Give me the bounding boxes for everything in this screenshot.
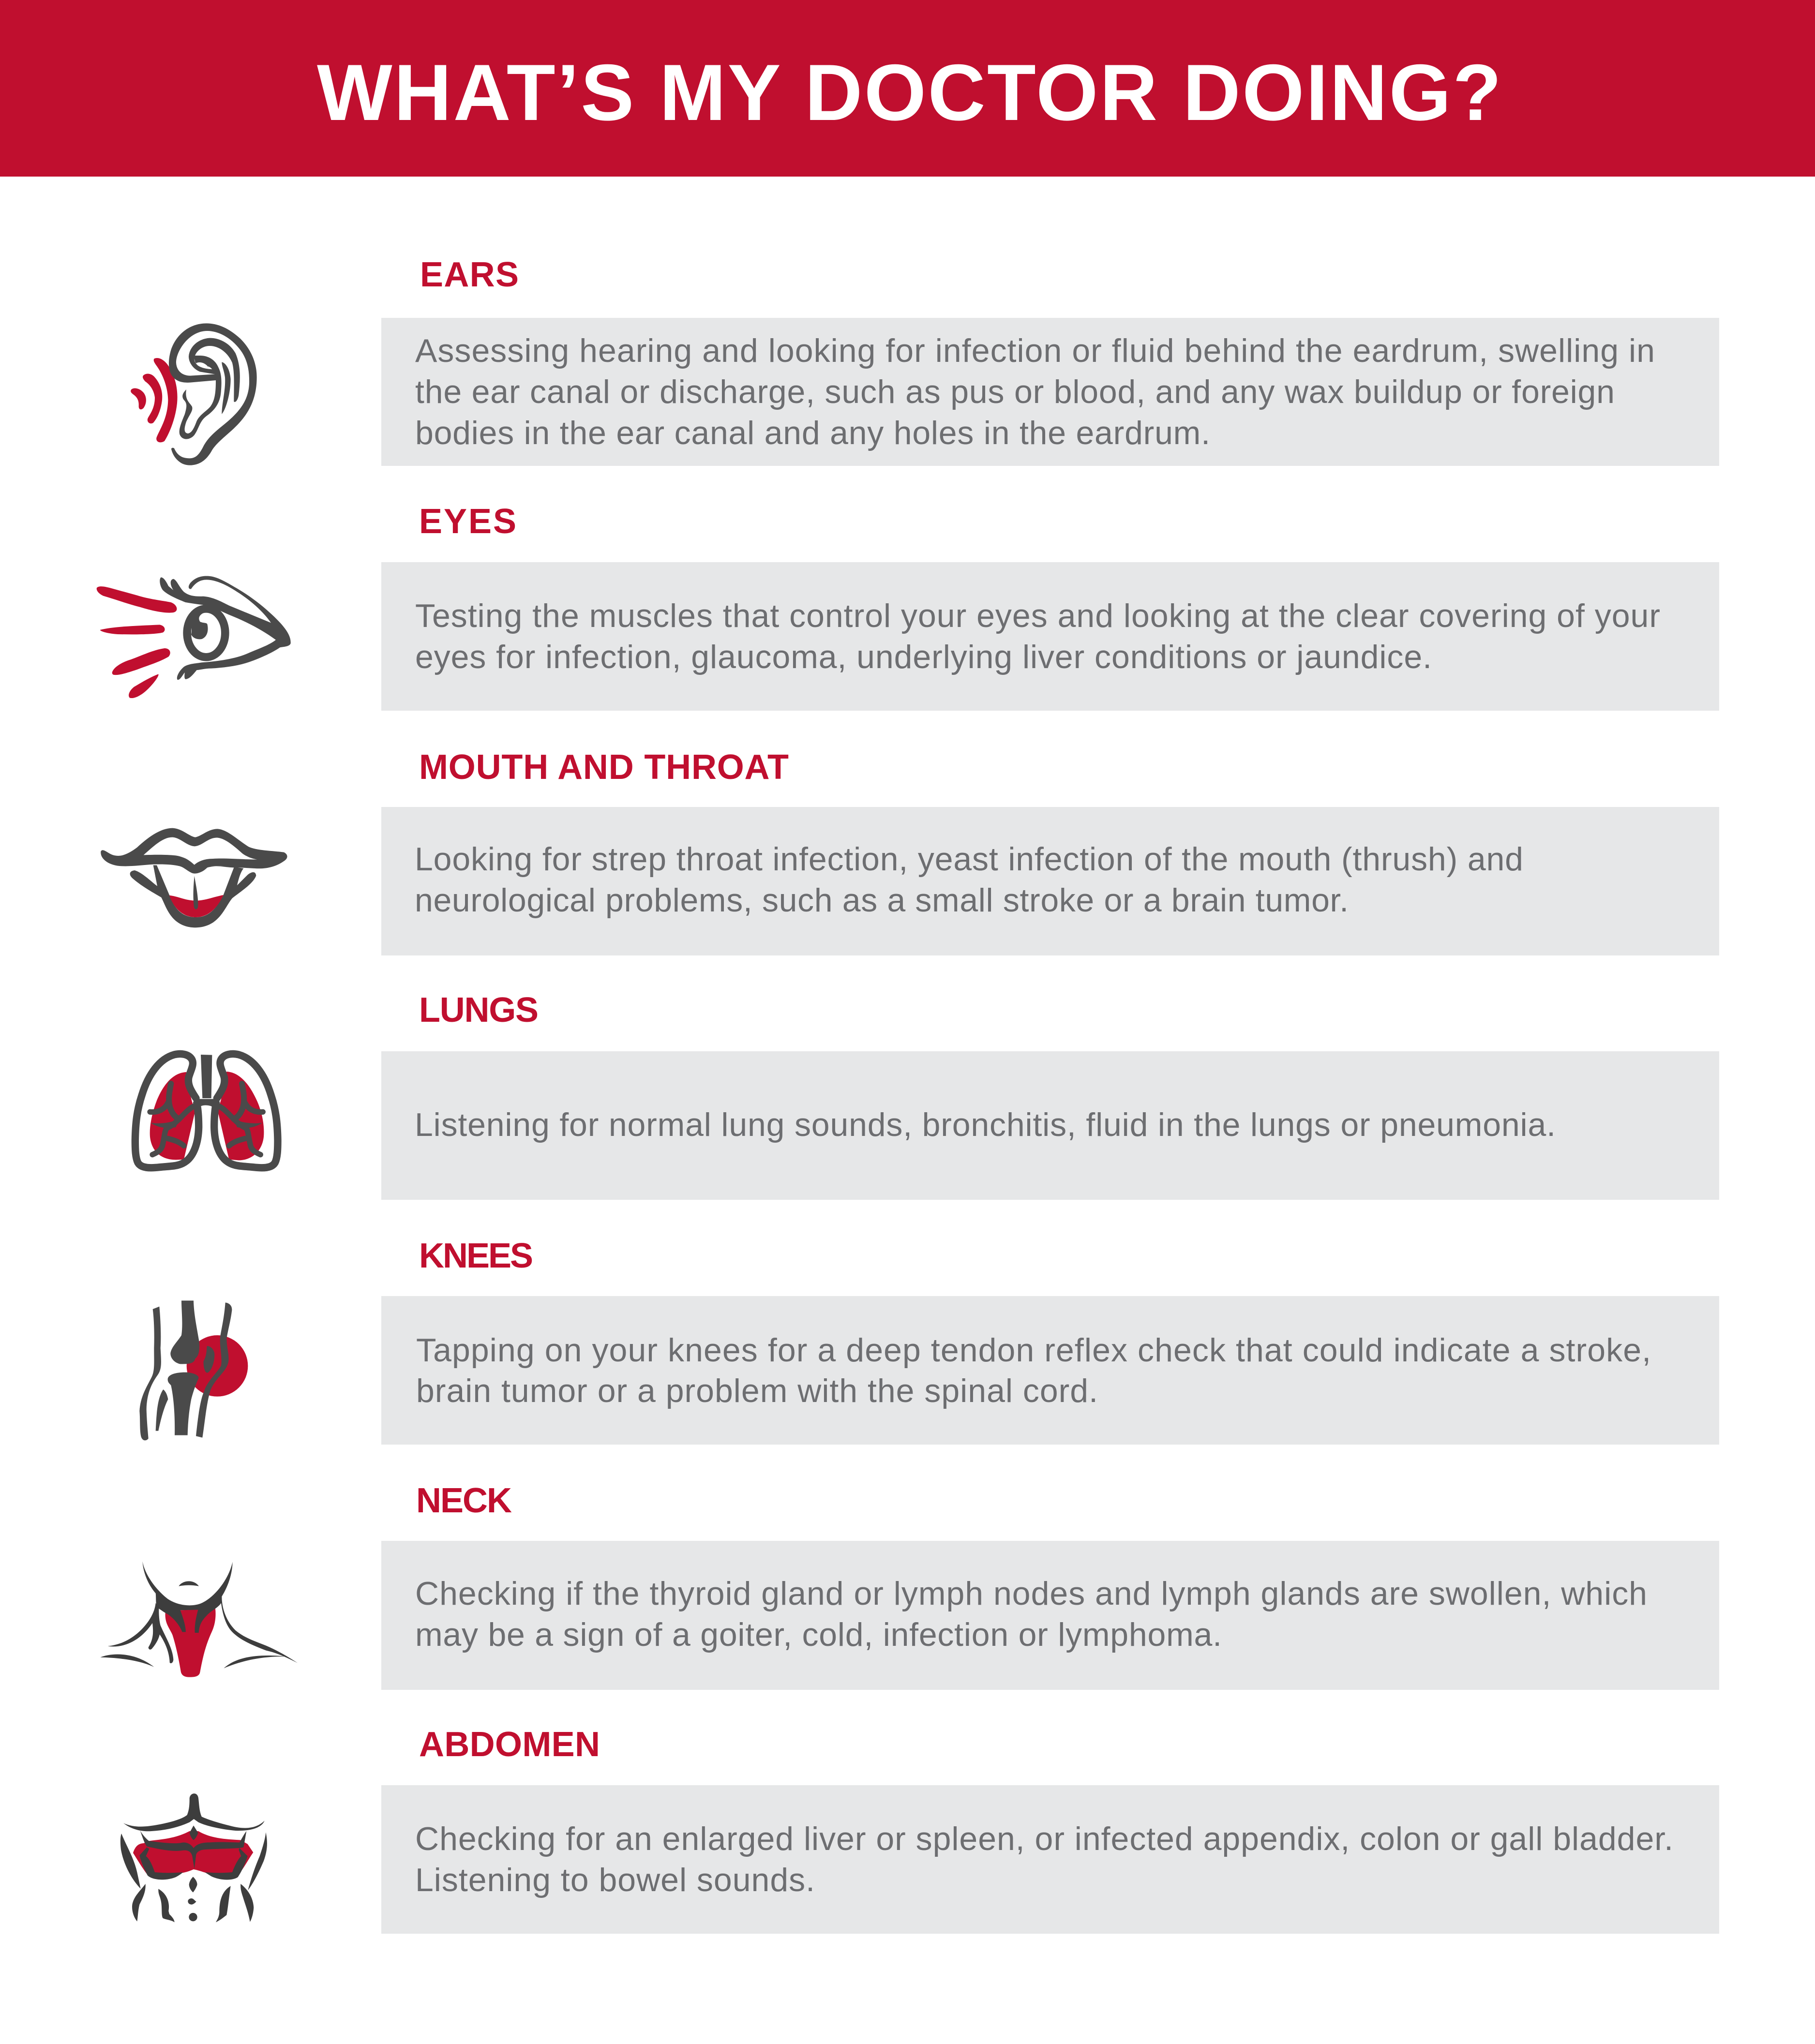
- header banner: [0, 0, 1815, 177]
- panel: mouth description: Looking for strep throat infection, yeast infection of the mouth (thrush) and: [415, 841, 1523, 878]
- panel: abdomen description: Listening to bowel sounds.: [415, 1862, 815, 1898]
- panel: neck description: may be a sign of a goiter, cold, infection or lymphoma.: [415, 1616, 1222, 1653]
- heading: eyes: EYES: [419, 502, 516, 541]
- title: WHAT’S MY DOCTOR DOING?: [317, 48, 1501, 137]
- panel: knees description: Tapping on your knees for a deep tendon reflex check that could indicate a stroke,: [416, 1332, 1651, 1369]
- section: mouth and throat: [101, 748, 1719, 955]
- panel: neck description: Checking if the thyroid gland or lymph nodes and lymph glands are swollen, which: [415, 1575, 1647, 1612]
- panel: lungs description: Listening for normal lung sounds, bronchitis, fluid in the lungs or pneumonia.: [415, 1106, 1556, 1143]
- icon: neck and thyroid: [100, 1561, 298, 1677]
- section: knees: [139, 1237, 1719, 1445]
- heading: knees: KNEES: [419, 1237, 533, 1275]
- panel: abdomen description: [381, 1785, 1719, 1934]
- heading: neck: NECK: [416, 1481, 512, 1520]
- panel: mouth description: neurological problems, such as a small stroke or a brain tumor.: [415, 882, 1349, 919]
- section: ears: [131, 255, 1719, 466]
- panel: neck description: [381, 1541, 1719, 1690]
- icon: ear with sound waves: [131, 323, 257, 465]
- panel: ears description: Assessing hearing and looking for infection or fluid behind the eardrum, swelling in: [415, 332, 1655, 369]
- icon: abdomen: [120, 1793, 267, 1922]
- section: abdomen: [120, 1725, 1719, 1934]
- icon: knee joint: [139, 1300, 248, 1440]
- section: neck: [100, 1481, 1719, 1690]
- section: lungs: [135, 991, 1719, 1200]
- icon: lungs: [135, 1054, 278, 1168]
- heading: lungs: LUNGS: [419, 991, 539, 1029]
- icon: mouth with tongue: [101, 828, 287, 927]
- panel: knees description: brain tumor or a problem with the spinal cord.: [416, 1373, 1098, 1409]
- panel: mouth description: [381, 807, 1719, 955]
- panel: eyes description: eyes for infection, glaucoma, underlying liver conditions or jaundice.: [415, 639, 1432, 675]
- panel: knees description: [381, 1296, 1719, 1445]
- panel: abdomen description: Checking for an enlarged liver or spleen, or infected appendix, colon or gall bladder.: [415, 1820, 1673, 1857]
- panel: lungs description: [381, 1051, 1719, 1200]
- icon: eye with rays: [97, 576, 291, 698]
- panel: eyes description: [381, 562, 1719, 711]
- panel: eyes description: Testing the muscles that control your eyes and looking at the clear covering of your: [415, 597, 1660, 634]
- heading: ears: EARS: [420, 255, 519, 294]
- heading: abdomen: ABDOMEN: [419, 1725, 600, 1764]
- heading: mouth and throat: MOUTH AND THROAT: [419, 748, 789, 787]
- panel: ears description: bodies in the ear canal and any holes in the eardrum.: [415, 415, 1210, 451]
- panel: ears description: the ear canal or discharge, such as pus or blood, and any wax buildup or foreign: [415, 373, 1615, 410]
- section: eyes: [97, 502, 1719, 711]
- panel: ears description: [381, 318, 1719, 466]
